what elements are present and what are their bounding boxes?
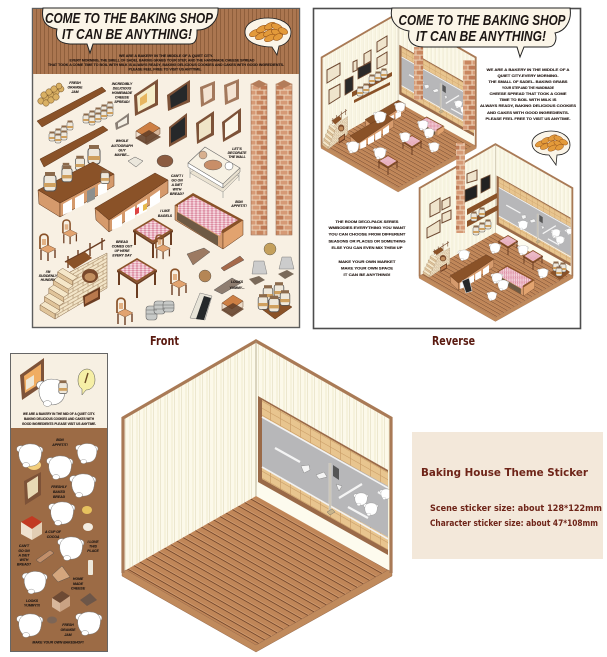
chalkboard sign — [190, 293, 212, 320]
series text: YOU CAN CHOOSE FROM DIFFERENT — [328, 232, 406, 236]
strip captions: THIS — [89, 544, 98, 548]
strip captions: CAN'T — [19, 544, 30, 548]
header text — [48, 54, 284, 72]
strip captions: BREAD — [53, 495, 66, 499]
small item stickers — [21, 472, 97, 624]
sheet captions: EVERY DAY — [112, 254, 132, 258]
sheet captions: MAYBE... — [115, 153, 129, 157]
strip captions: LOOKS — [26, 599, 39, 603]
strip captions: I LOVE — [87, 540, 99, 544]
caption: Reverse: Reverse — [432, 334, 475, 348]
description text: WE ARE A BAKERY IN THE MIDDLE OF A — [486, 68, 570, 72]
strip captions: CHEESE — [71, 586, 86, 590]
sheet captions: HOMEMADE — [112, 91, 133, 95]
small decorations — [187, 243, 294, 294]
series text: MAKE YOUR OWN MARKET — [338, 260, 396, 264]
bear stickers — [16, 444, 102, 638]
sheet captions: GO ON — [171, 178, 183, 182]
sheet captions: BAGELS — [158, 214, 173, 218]
sheet captions: A DIET — [170, 183, 183, 187]
description text: QUIET CITY.EVERY MORNING. — [498, 74, 558, 78]
strip captions: HOME — [73, 577, 84, 581]
sheet captions: ORANGE — [68, 86, 83, 90]
header text: THAT TOOK A COME TIME TO BOIL WITH MILK IS ALWAYS READY, BAKING DELICIOUS COOKIES AND CAKES WITH GOOD INGREDIENTS. — [48, 63, 284, 67]
title speech bubble: COME TO THE BAKING SHOP — [45, 10, 214, 27]
sheet captions: LOOKS — [231, 280, 244, 284]
strip intro text: GOOD INGREDIENTS PLEASE VISIT US ANYTIME. — [22, 422, 96, 426]
sheet captions: DELICIOUS — [113, 86, 132, 90]
title speech bubble: COME TO THE BAKING SHOP — [398, 12, 566, 29]
brown sticker area — [11, 428, 107, 651]
sheet captions: I'M — [46, 270, 50, 274]
sheet captions: AUTOGRAPH — [110, 144, 133, 148]
strip captions: WITH — [20, 558, 29, 562]
lower room scene — [419, 143, 573, 321]
description text: PLEASE FEEL FREE TO VISIT US ANYTIME. — [486, 117, 570, 121]
strip intro text: BAKING DELICIOUS COOKIES AND CAKES WITH — [24, 417, 94, 421]
sheet captions: I LIKE — [160, 209, 171, 213]
sheet captions: WHOLE — [116, 139, 129, 143]
sheet captions: LET'S — [232, 147, 242, 151]
jars — [38, 83, 113, 175]
strip captions — [17, 438, 99, 644]
strip captions: ORANGE — [61, 628, 76, 632]
header text: WE ARE A BAKERY IN THE MIDDLE OF A QUIET CITY. — [119, 54, 213, 58]
strip captions: FRESH — [62, 623, 74, 627]
description text: ALWAYS READY, BAKING DELICIOUS COOKIES — [480, 104, 577, 108]
sheet captions: HUNGRY — [41, 278, 56, 282]
strip captions: YUMMY!!! — [24, 604, 41, 608]
sheet captions: WITH — [173, 188, 182, 192]
sheet captions: SUDDENLY — [39, 274, 58, 278]
scene sticker size: Scene sticker size: about 128*122mm — [430, 504, 602, 514]
brick pillars — [251, 80, 292, 235]
croissant speech bubble — [532, 131, 570, 165]
info panel — [412, 432, 603, 559]
window and bear illustration — [20, 358, 95, 406]
title speech bubble: IT CAN BE ANYTHING! — [416, 28, 546, 45]
sheet captions — [39, 81, 248, 290]
panel: reverse sticker sheet — [314, 8, 580, 328]
series text: SEASONS OR PLACES OR SOMETHING — [328, 240, 406, 244]
description text — [480, 68, 577, 121]
description text: TIME TO BOIL WITH MILK IS — [500, 98, 557, 102]
series text — [328, 220, 406, 277]
sheet captions: INCREDIBLY — [112, 82, 133, 86]
sheet captions: GUY — [118, 148, 126, 152]
info title: Baking House Theme Sticker — [421, 466, 589, 479]
plates — [146, 301, 174, 320]
sheet captions: BON — [235, 200, 243, 204]
strip captions: A DIET — [18, 554, 30, 558]
sheet captions: CAN'T I — [171, 174, 183, 178]
white prep table — [188, 147, 240, 198]
description text: AND CAKES WITH GOOD INGREDIENTS. — [487, 111, 569, 115]
strip captions: COCOA — [47, 535, 60, 539]
strip intro text: WE ARE A BAKERY IN THE MID OF A QUIET CITY. — [23, 412, 95, 416]
description text: THE SMALL OF SADEL. BAKING GRABS — [488, 80, 568, 84]
strip captions: MADE — [73, 582, 84, 586]
pink tables — [117, 218, 173, 298]
sheet captions: FRESH — [69, 81, 81, 85]
wall shelves — [37, 87, 108, 167]
strip captions: BREAD? — [17, 562, 31, 566]
sheet captions: APPETIT! — [230, 204, 248, 208]
title speech bubble: IT CAN BE ANYTHING! — [62, 26, 192, 43]
large empty room scene — [122, 339, 392, 652]
sheet captions: JAM — [71, 90, 79, 94]
series text: WMBODIES EVERYTHING YOU WANT — [328, 226, 406, 230]
chairs — [40, 220, 187, 325]
panel: front sticker sheet — [32, 8, 300, 328]
sheet captions: YUMMY... — [229, 286, 245, 290]
strip captions: BAKED — [53, 490, 66, 494]
strip captions: MAKE YOUR OWN BAKESHOP! — [32, 640, 84, 644]
panel: character sticker strip — [10, 354, 108, 652]
sheet captions: DECORATE — [228, 151, 247, 155]
display case and jar stand — [221, 282, 292, 319]
sheet captions: BREAD? — [170, 192, 184, 196]
sheet captions: COMES OUT — [112, 244, 133, 248]
framed pictures — [115, 79, 241, 147]
sheet captions: UP HERE — [115, 249, 130, 253]
title speech bubble — [391, 8, 570, 57]
header text: PLEASE FEEL FREE TO VISIT US ANYTIME. — [128, 68, 202, 72]
caption: Front: Front — [150, 334, 179, 348]
series text: ELSE YOU CAN EVEN MIX THEM UP — [332, 246, 403, 250]
strip captions: A CUP OF — [44, 530, 62, 534]
strip captions: JAM — [64, 633, 72, 637]
strip captions: APPETIT! — [51, 443, 69, 447]
sheet captions: CHEESE — [115, 96, 130, 100]
header text: EVERY MORNING, THE SMELL OF SADEL BAKING GRABS YOUR STEP, AND THE HANDMADE CHEESE SPREAD — [70, 58, 255, 62]
strip captions: GO ON — [18, 549, 30, 553]
series text: MAKE YOUR OWN SPACE — [341, 266, 394, 270]
description text: YOUR STEP.AND THE HANDMADE — [502, 86, 554, 90]
series text: THE ROOM DECO-PACK SERIES — [336, 220, 399, 224]
strip captions: PLACE — [87, 549, 99, 553]
description text: CHEESE SPREAD THAT TOOK A COME — [490, 92, 567, 96]
counters — [38, 162, 168, 232]
upper room scene — [321, 12, 476, 192]
pink bench table — [175, 193, 243, 249]
strip captions: BON — [56, 438, 64, 442]
sheet captions: BREAD — [116, 240, 129, 244]
sheet captions: SPREAD! — [114, 100, 130, 104]
sheet captions: THE WALL — [228, 155, 246, 159]
series text: IT CAN BE ANYTHING! — [344, 273, 390, 277]
strip intro text — [22, 412, 96, 426]
header band — [33, 9, 299, 74]
croissant speech bubble — [245, 18, 291, 55]
coffee machine and cake — [128, 122, 173, 167]
title speech bubble — [43, 8, 218, 53]
stairs with brick oven — [40, 238, 107, 319]
strip captions: FRESHLY — [51, 485, 68, 489]
